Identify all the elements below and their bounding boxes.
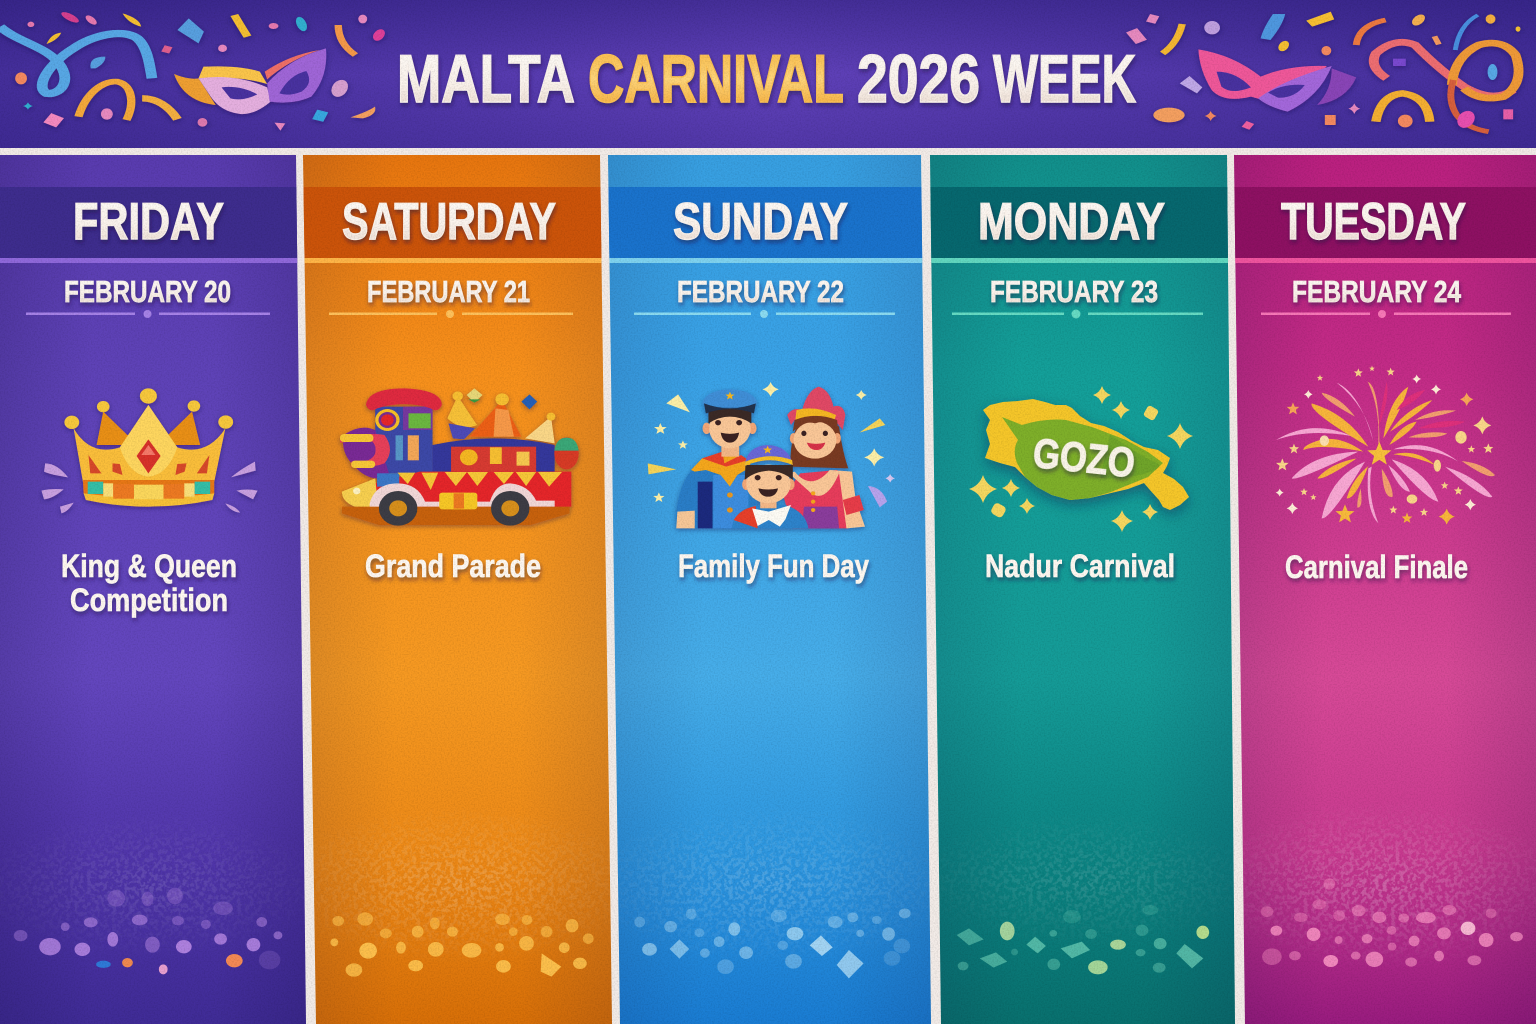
panel: Saturday xyxy=(303,155,612,1024)
date: FEBRUARY 22 xyxy=(677,274,844,309)
panel: Friday xyxy=(0,155,340,1024)
icon: family in costumes xyxy=(648,382,895,528)
firework centre star xyxy=(1367,442,1391,465)
icon: parade float xyxy=(340,388,579,526)
day heading: SUNDAY xyxy=(673,193,848,251)
date: FEBRUARY 23 xyxy=(990,274,1158,309)
date: FEBRUARY 21 xyxy=(367,274,530,309)
confetti: Sunday xyxy=(634,908,911,978)
day heading: FRIDAY xyxy=(73,193,224,251)
title: CARNIVAL xyxy=(588,41,843,117)
father xyxy=(676,460,758,528)
title: 2026 xyxy=(857,41,980,117)
icon: Gozo island map xyxy=(969,386,1193,532)
confetti: Monday xyxy=(957,905,1209,974)
event label: King & Queen xyxy=(61,548,237,584)
event label: Nadur Carnival xyxy=(985,548,1175,584)
title: WEEK xyxy=(993,41,1136,117)
confetti: Friday xyxy=(14,888,282,974)
date divider xyxy=(26,310,270,318)
confetti: Saturday xyxy=(330,912,594,977)
header banner xyxy=(0,0,1536,148)
title: MALTA xyxy=(397,41,574,117)
event label: Carnival Finale xyxy=(1285,549,1468,585)
day heading: TUESDAY xyxy=(1281,193,1466,251)
date divider xyxy=(634,310,895,318)
panel: Sunday xyxy=(608,155,931,1024)
sparkles xyxy=(648,382,895,507)
panel: Tuesday xyxy=(1234,155,1536,1024)
event label: Grand Parade xyxy=(365,548,541,584)
Gozo label: GOZO xyxy=(1031,429,1137,486)
icon: fireworks xyxy=(1276,366,1495,525)
icon: crown xyxy=(41,388,258,513)
event label: Competition xyxy=(70,582,228,618)
left confetti and mask xyxy=(0,10,387,131)
date divider xyxy=(1261,310,1511,318)
date: FEBRUARY 24 xyxy=(1292,274,1462,309)
day heading: SATURDAY xyxy=(342,193,556,251)
date: FEBRUARY 20 xyxy=(64,274,231,309)
event label: Family Fun Day xyxy=(678,548,869,584)
day heading: MONDAY xyxy=(978,193,1165,251)
date divider xyxy=(952,310,1203,318)
child xyxy=(732,505,808,528)
mother xyxy=(791,418,848,468)
event label xyxy=(61,548,237,618)
confetti: Tuesday xyxy=(1261,878,1523,967)
panel: Monday xyxy=(930,155,1235,1024)
date divider xyxy=(329,310,573,318)
right confetti and mask xyxy=(1126,12,1520,132)
